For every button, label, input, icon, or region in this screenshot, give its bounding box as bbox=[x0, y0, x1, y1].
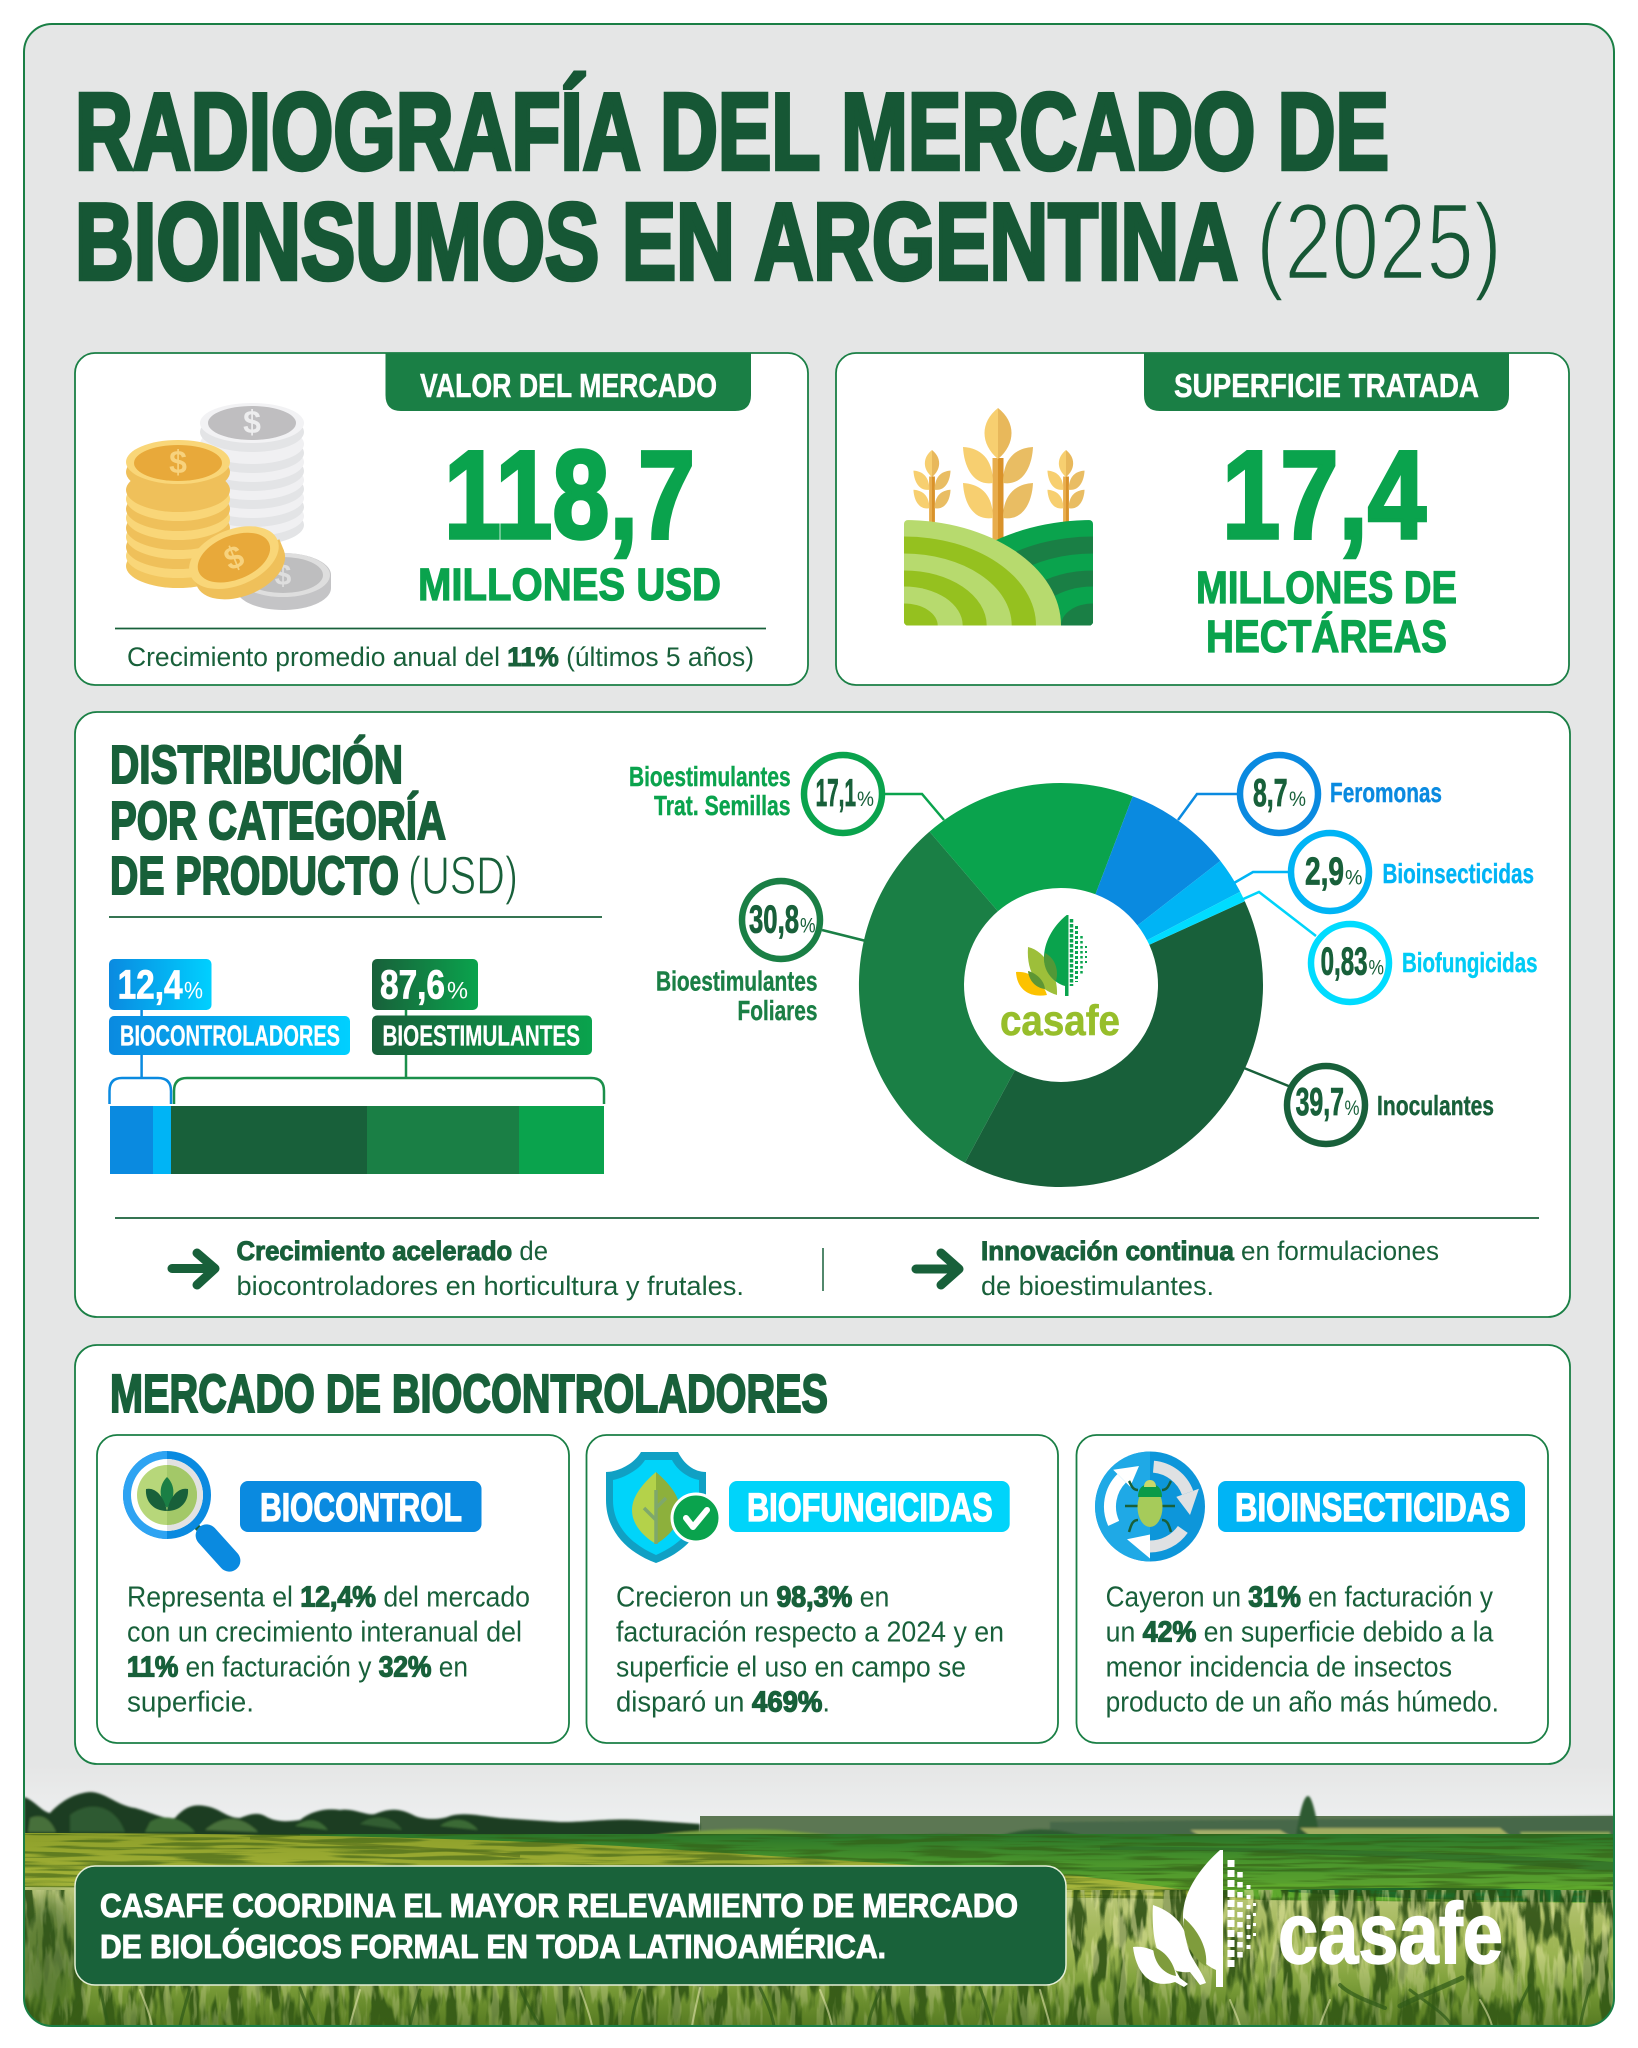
callout: 39,7% inoculantes: Inoculantes bbox=[1377, 1090, 1494, 1121]
panel: valor del mercado bbox=[75, 353, 808, 685]
badge: biocontrol bbox=[240, 1481, 482, 1532]
text: biocontrol: con un crecimiento interanual del bbox=[127, 1617, 522, 1649]
unit: millones usd: MILLONES USD bbox=[418, 559, 721, 610]
big number: 118,7: 118,7 bbox=[444, 426, 695, 565]
icon: coins: $ bbox=[219, 538, 249, 578]
tab: valor del mercado: VALOR DEL MERCADO bbox=[420, 367, 717, 404]
callout: 39,7% inoculantes: % bbox=[1344, 1097, 1360, 1120]
note: innovación continua bbox=[981, 1236, 1439, 1301]
callout: 8,7% feromonas bbox=[1178, 755, 1442, 833]
unit: millones de hectáreas bbox=[1196, 562, 1457, 662]
card: biocontrol bbox=[97, 1435, 569, 1743]
heading: distribución: (USD) bbox=[408, 846, 518, 906]
logo: casafe center: casafe bbox=[1000, 997, 1120, 1045]
note: innovación continua: de bioestimulantes. bbox=[981, 1271, 1214, 1301]
footer banner: DE BIOLÓGICOS FORMAL EN TODA LATINOAMÉRICA. bbox=[100, 1928, 886, 1965]
heading: distribución: DISTRIBUCIÓN bbox=[110, 735, 403, 795]
callout: 17,1% trat. semillas: % bbox=[857, 788, 874, 811]
text: biocontrol: superficie. bbox=[127, 1687, 254, 1719]
badge: biocontrol: BIOCONTROL bbox=[260, 1486, 462, 1530]
label: 12,4% biocontroladores: 12,4 bbox=[118, 962, 183, 1008]
callout: 2,9% bioinsecticidas: 2,9 bbox=[1305, 850, 1344, 894]
stacked bar chart bbox=[109, 959, 604, 1174]
text: bioinsecticidas: producto de un año más húmedo. bbox=[1106, 1687, 1499, 1719]
callout: 2,9% bioinsecticidas: Bioinsecticidas bbox=[1382, 858, 1534, 889]
callout: 0,83% biofungicidas: % bbox=[1368, 956, 1384, 980]
heading: distribución: DE PRODUCTO bbox=[110, 846, 399, 906]
panel: distribución por categoría bbox=[75, 712, 1570, 1317]
icon: bug cycle bbox=[1095, 1452, 1205, 1562]
label: 87,6% bioestimulantes: % bbox=[447, 978, 468, 1004]
heading: distribución: POR CATEGORÍA bbox=[110, 791, 446, 851]
label: 87,6% bioestimulantes: 87,6 bbox=[380, 962, 445, 1008]
tab: valor del mercado bbox=[386, 353, 751, 411]
badge: biofungicidas bbox=[729, 1481, 1010, 1532]
title: (2025) bbox=[1256, 181, 1502, 303]
footer landscape photo bbox=[25, 1790, 1613, 2025]
text: bioinsecticidas bbox=[1106, 1582, 1499, 1719]
logo: casafe center bbox=[1000, 915, 1120, 1045]
icon: wheat field bbox=[904, 408, 1093, 626]
card: bioinsecticidas bbox=[1076, 1435, 1548, 1743]
text: bioinsecticidas: menor incidencia de insectos bbox=[1106, 1652, 1452, 1684]
label: 87,6% bioestimulantes bbox=[372, 959, 592, 1055]
icon: coins: $ bbox=[169, 444, 187, 480]
callout: 17,1% trat. semillas: Bioestimulantes bbox=[629, 761, 791, 792]
callout: 30,8% foliares: % bbox=[800, 914, 816, 937]
text: biofungicidas: disparó un 469%. bbox=[616, 1687, 830, 1719]
callout: 30,8% foliares: 30,8 bbox=[749, 898, 799, 941]
label: 12,4% biocontroladores bbox=[109, 959, 350, 1055]
callout: 0,83% biofungicidas: 0,83 bbox=[1321, 940, 1368, 984]
badge: bioinsecticidas: BIOINSECTICIDAS bbox=[1235, 1486, 1510, 1530]
icon: coins: $ bbox=[243, 404, 261, 440]
text: biofungicidas: Crecieron un 98,3% en bbox=[616, 1582, 889, 1614]
callout: 2,9% bioinsecticidas: % bbox=[1345, 866, 1362, 890]
label: 12,4% biocontroladores: BIOCONTROLADORES bbox=[120, 1020, 340, 1052]
callout: 39,7% inoculantes bbox=[1244, 1066, 1494, 1144]
card: biofungicidas bbox=[586, 1435, 1058, 1743]
text: bioinsecticidas: Cayeron un 31% en facturación y bbox=[1106, 1582, 1493, 1614]
heading: distribución bbox=[110, 735, 518, 906]
arrow: innovación bbox=[916, 1253, 959, 1285]
tab: superficie tratada bbox=[1144, 353, 1509, 411]
badge: bioinsecticidas bbox=[1218, 1481, 1525, 1532]
note: innovación continua: Innovación continua en formulaciones bbox=[981, 1236, 1439, 1266]
callout: 30,8% foliares bbox=[656, 881, 866, 1026]
text: biocontrol: 11% en facturación y 32% en bbox=[127, 1652, 468, 1684]
title: BIOINSUMOS EN ARGENTINA bbox=[75, 181, 1238, 303]
icon: magnifier bbox=[123, 1451, 245, 1576]
panel: superficie tratada bbox=[835, 352, 1570, 686]
icon: shield bbox=[606, 1452, 720, 1563]
label: 87,6% bioestimulantes: BIOESTIMULANTES bbox=[382, 1020, 580, 1052]
callout: 0,83% biofungicidas bbox=[1241, 892, 1538, 1002]
label: 12,4% biocontroladores: % bbox=[184, 978, 203, 1004]
text: biocontrol bbox=[127, 1582, 530, 1719]
panel: mercado de biocontroladores bbox=[75, 1345, 1570, 1764]
icon: coins: $ bbox=[275, 559, 292, 592]
note: crecimiento acelerado: biocontroladores en horticultura y frutales. bbox=[236, 1271, 744, 1301]
badge: biofungicidas: BIOFUNGICIDAS bbox=[747, 1486, 993, 1530]
tab: superficie tratada: SUPERFICIE TRATADA bbox=[1174, 367, 1479, 404]
callout: 8,7% feromonas: Feromonas bbox=[1330, 777, 1442, 808]
callout: 2,9% bioinsecticidas bbox=[1234, 833, 1534, 911]
callout: 17,1% trat. semillas: Trat. Semillas bbox=[654, 790, 791, 821]
footer banner bbox=[75, 1866, 1066, 1985]
unit: millones de hectáreas: HECTÁREAS bbox=[1206, 611, 1447, 662]
footer banner: CASAFE COORDINA EL MAYOR RELEVAMIENTO DE MERCADO bbox=[100, 1887, 1018, 1924]
logo: casafe footer: casafe bbox=[1278, 1886, 1503, 1982]
callout: 0,83% biofungicidas: Biofungicidas bbox=[1402, 947, 1538, 978]
logo: casafe footer bbox=[1133, 1850, 1503, 1987]
text: biofungicidas: facturación respecto a 2024 y en bbox=[616, 1617, 1004, 1649]
note: crecimiento acelerado bbox=[236, 1236, 744, 1301]
unit: millones de hectáreas: MILLONES DE bbox=[1196, 562, 1457, 613]
callout: 8,7% feromonas: % bbox=[1289, 788, 1306, 811]
title bbox=[75, 71, 1502, 303]
big number: 17,4: 17,4 bbox=[1222, 426, 1426, 565]
text: bioinsecticidas: un 42% en superficie debido a la bbox=[1106, 1617, 1494, 1649]
text: biofungicidas bbox=[616, 1582, 1004, 1719]
text: biofungicidas: superficie el uso en campo se bbox=[616, 1652, 966, 1684]
callout: 39,7% inoculantes: 39,7 bbox=[1296, 1081, 1344, 1124]
callout: 17,1% trat. semillas: 17,1 bbox=[816, 772, 856, 815]
text: biocontrol: Representa el 12,4% del mercado bbox=[127, 1582, 530, 1614]
growth note: Crecimiento promedio anual del 11% (últimos 5 años) bbox=[127, 642, 754, 672]
callout: 30,8% foliares: Bioestimulantes bbox=[656, 966, 818, 997]
callout: 8,7% feromonas: 8,7 bbox=[1253, 772, 1288, 815]
donut chart bbox=[859, 783, 1263, 1187]
arrow: crecimiento bbox=[172, 1253, 215, 1285]
heading: mercado de biocontroladores: MERCADO DE BIOCONTROLADORES bbox=[110, 1364, 828, 1424]
callout: 30,8% foliares: Foliares bbox=[738, 995, 818, 1026]
note: crecimiento acelerado: Crecimiento acelerado de bbox=[236, 1236, 548, 1266]
callout: 17,1% trat. semillas bbox=[629, 755, 944, 833]
icon: coins bbox=[126, 403, 331, 612]
